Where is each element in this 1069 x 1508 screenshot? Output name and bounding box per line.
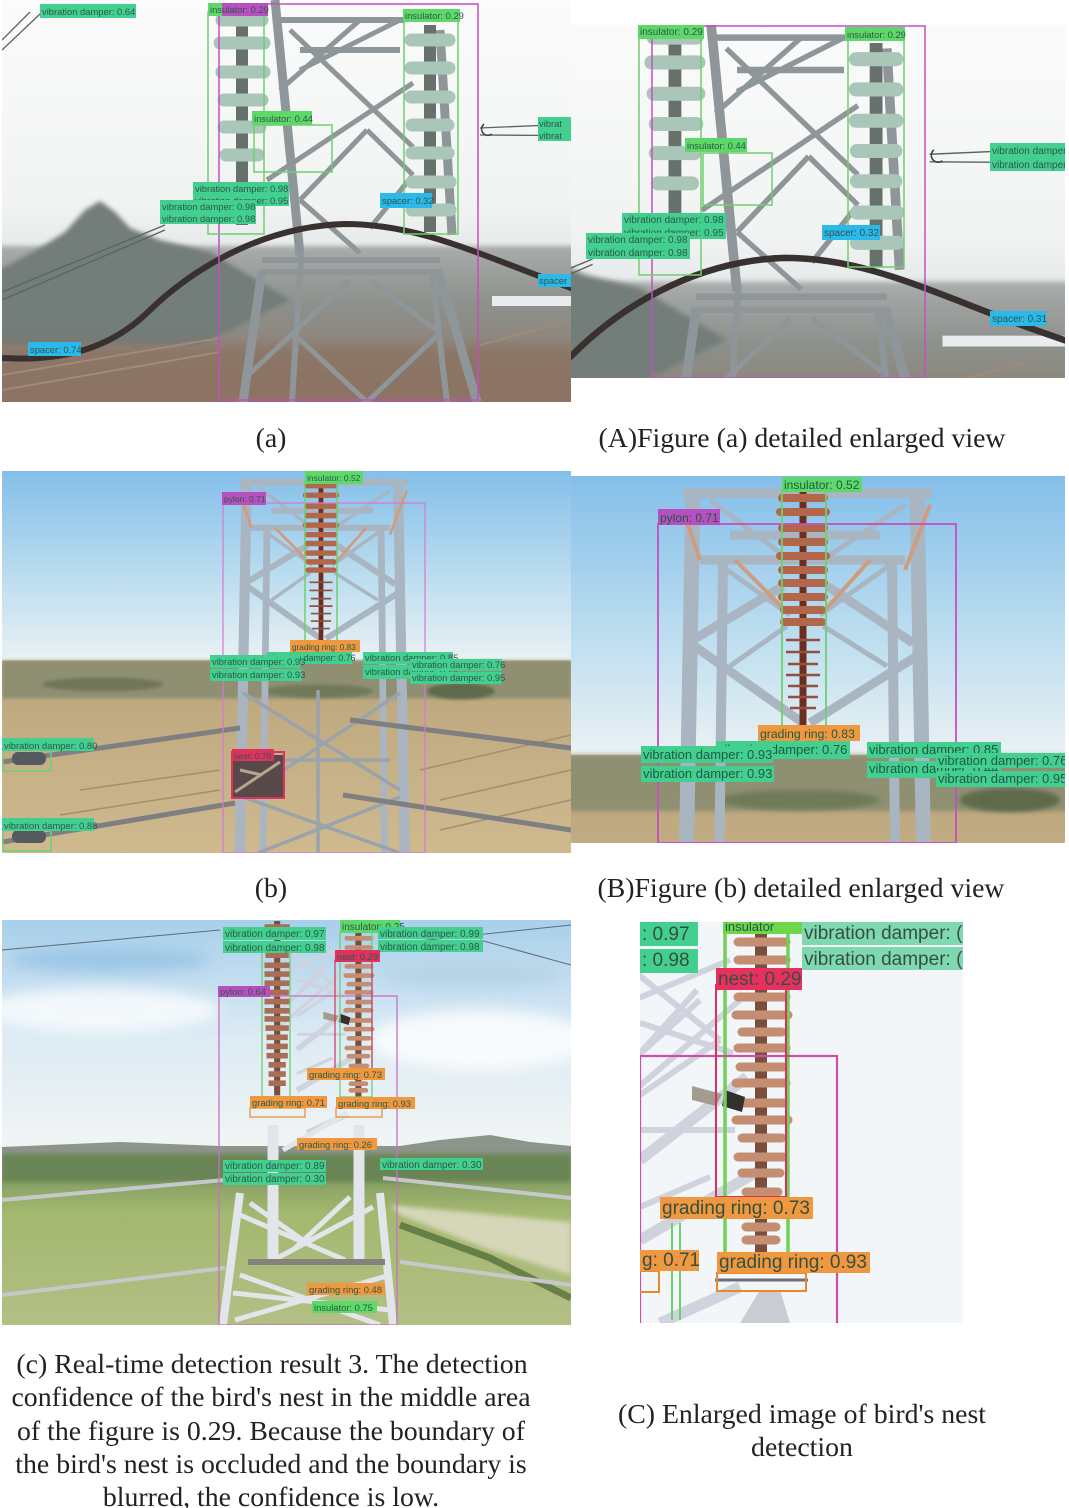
label group (B): vibration damper: 0.93	[643, 747, 772, 762]
label group (C): g: 0.71	[642, 1250, 700, 1271]
label group (a): vibration damper: 0.98	[162, 213, 255, 224]
label group (b): nest: 0.78	[234, 751, 272, 761]
label group (a): insulator: 0.29	[405, 10, 464, 21]
panel: detection result (b)	[2, 471, 571, 853]
label group (c): vibration damper: 0.98	[225, 943, 325, 954]
caption (a): (a)	[256, 423, 286, 454]
label group (c): vibration damper: 0.97	[225, 929, 325, 940]
label group (B): vibration damper: 0.76	[718, 742, 847, 757]
label group (C)	[640, 919, 963, 1273]
label group (B)	[641, 477, 1067, 787]
label group (a): insulator: 0.29	[210, 4, 269, 15]
label group (B): vibration damper: 0.76	[938, 753, 1067, 768]
label group (b): grading ring: 0.83	[292, 643, 356, 652]
label group (A): insulator: 0.44	[687, 140, 746, 151]
panel: enlarged view (B)	[571, 476, 1065, 843]
label group (A): vibration damper: 0.95	[624, 228, 724, 239]
caption (c): (c) Real-time detection result 3. The detection	[16, 1349, 528, 1380]
label group (B): vibration damper: 0.85	[869, 742, 998, 757]
label group (A): insulator: 0.29	[640, 27, 703, 38]
label group (C): vibration damper: (	[804, 923, 963, 944]
nest	[232, 752, 284, 798]
label group (b): vibration damper: 0.76	[412, 659, 505, 670]
label group (c): vibration damper: 0.30	[382, 1160, 482, 1171]
label group (b): insulator: 0.52	[307, 473, 361, 483]
label group (A): spacer: 0.31	[992, 314, 1047, 325]
label group (A): vibration damper	[992, 146, 1067, 157]
label group (A): vibration damper: 0.98	[588, 248, 688, 259]
label group (b): vibration damper: 0.93	[212, 656, 305, 667]
panel: enlarged view (C)	[640, 922, 963, 1323]
label group (c): vibration damper: 0.30	[225, 1174, 325, 1185]
label group (A): insulator: 0.29	[847, 29, 906, 40]
panel: detection result (c)	[0, 920, 590, 1325]
label group (b): vibration damper: 0.80	[4, 740, 97, 751]
label group (A): vibration damper	[992, 160, 1067, 171]
label group (b): vibration damper: 0.76	[268, 653, 356, 663]
label group (c): grading ring: 0.93	[338, 1098, 411, 1109]
label group (a): vibration damper: 0.95	[195, 195, 288, 206]
caption (C): detection	[751, 1432, 853, 1463]
label group (a): spacer	[539, 275, 567, 286]
label group (B): grading ring: 0.83	[760, 727, 855, 741]
label group (a)	[28, 3, 571, 356]
label group (B): vibration damper: 0.44	[869, 761, 998, 776]
label group (a): vibrat	[539, 118, 562, 129]
label group (C): : 0.97	[642, 924, 690, 945]
label group (B): insulator: 0.52	[784, 478, 860, 492]
label group (C): vibration damper: (	[804, 949, 963, 970]
label group (a): spacer: 0.74	[30, 344, 82, 355]
label group (B): vibration damper: 0.95	[938, 771, 1067, 786]
label group (B): vibration damper: 0.93	[643, 766, 772, 781]
caption (A): (A)Figure (a) detailed enlarged view	[598, 423, 1006, 454]
label group (a): vibration damper: 0.98	[195, 183, 288, 194]
label group (C): insulator	[725, 919, 775, 934]
label group (c): grading ring: 0.73	[309, 1069, 382, 1080]
caption (c): the bird's nest is occluded and the boundary is	[15, 1449, 527, 1480]
label group (C): grading ring: 0.93	[719, 1252, 867, 1273]
label group (A): vibration damper: 0.98	[624, 215, 724, 226]
caption (c)	[11, 1349, 531, 1508]
label group (b): vibration damper: 0.88	[4, 820, 97, 831]
label group (c): vibration damper: 0.99	[380, 929, 480, 940]
label group (c): grading ring: 0.71	[252, 1097, 325, 1108]
caption (B): (B)Figure (b) detailed enlarged view	[597, 873, 1005, 904]
label group (A): spacer: 0.32	[824, 228, 879, 239]
label group (b): vibration damper: 0.95	[412, 672, 505, 683]
label group (c): insulator: 0.25	[342, 922, 405, 933]
label group (a): vibrat	[539, 130, 562, 141]
label group (b)	[2, 471, 505, 831]
label group (b): vibration damper: 0.93	[212, 669, 305, 680]
label group (c): nest: 0.29	[337, 951, 378, 962]
label group (C): nest: 0.29	[718, 969, 801, 990]
label group (c): grading ring: 0.48	[309, 1284, 382, 1295]
caption (C): (C) Enlarged image of bird's nest	[618, 1399, 986, 1430]
label group (A): vibration damper: 0.98	[588, 235, 688, 246]
label group (c): grading ring: 0.26	[299, 1139, 372, 1150]
caption (c): of the figure is 0.29. Because the boundary of	[17, 1416, 526, 1447]
label group (A)	[586, 25, 1067, 326]
label group (C): : 0.98	[642, 950, 690, 971]
label group (c): vibration damper: 0.89	[225, 1161, 325, 1172]
label group (c): vibration damper: 0.98	[380, 942, 480, 953]
label group (b): pylon: 0.71	[224, 494, 266, 504]
label group (C): grading ring: 0.73	[662, 1198, 810, 1219]
label group (a): vibration damper: 0.98	[162, 201, 255, 212]
label group (b): vibration damper: 0.85	[365, 652, 458, 663]
panel: detection result (a)	[2, 0, 571, 402]
label group (c)	[218, 920, 483, 1313]
caption (C)	[618, 1399, 986, 1463]
label group (a): insulator: 0.44	[254, 113, 313, 124]
caption (b): (b)	[255, 873, 287, 904]
label group (c): pylon: 0.64	[220, 986, 266, 997]
label group (a): vibration damper: 0.64	[42, 6, 135, 17]
caption (c): confidence of the bird's nest in the middle area	[11, 1382, 531, 1413]
panel: enlarged view (A)	[571, 25, 1065, 378]
label group (a): spacer: 0.32	[382, 195, 434, 206]
label group (B): pylon: 0.71	[660, 511, 719, 525]
label group (b): vibration damper: 0.44	[365, 666, 458, 677]
label group (c): insulator: 0.75	[314, 1302, 373, 1313]
